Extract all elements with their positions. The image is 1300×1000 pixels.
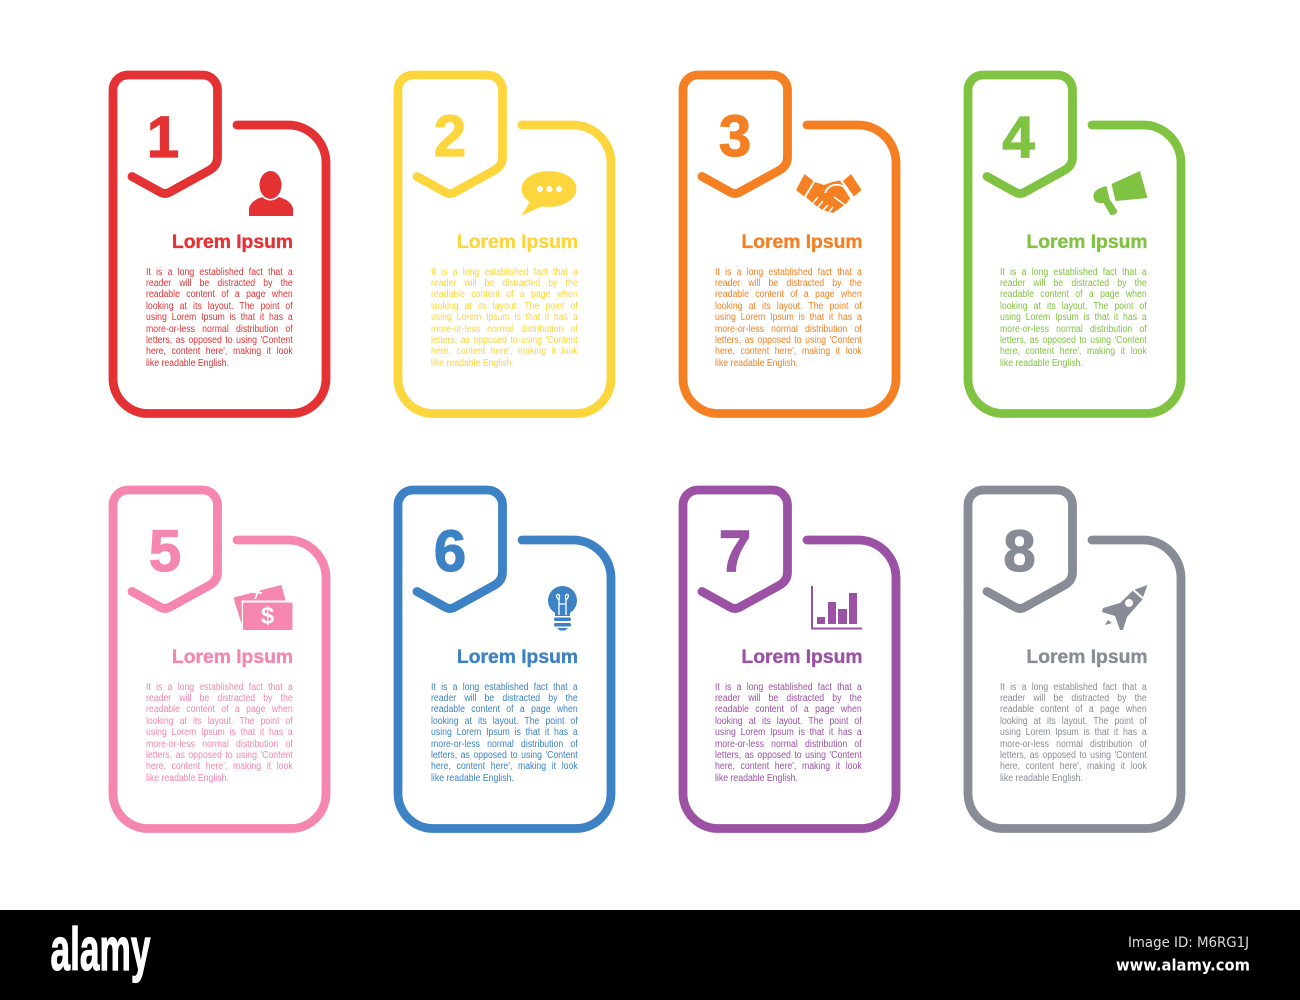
- body text: [1000, 682, 1147, 784]
- body text: readable content of a page when: [715, 289, 862, 300]
- body text: readable content of a page when: [431, 289, 578, 300]
- body text: looking at its layout. The point of: [146, 716, 293, 727]
- heading: Lorem Ipsum: [457, 647, 578, 668]
- body text: more-or-less normal distribution of: [146, 324, 293, 335]
- heading: Lorem Ipsum: [1026, 647, 1147, 668]
- number 2: 2: [434, 104, 466, 169]
- body text: using Lorem Ipsum is that it has a: [1000, 727, 1147, 738]
- body text: readable content of a page when: [146, 289, 293, 300]
- body text: looking at its layout. The point of: [146, 301, 293, 312]
- body text: [146, 682, 293, 784]
- body text: It is a long established fact that a: [431, 266, 578, 278]
- number 8: 8: [1003, 519, 1035, 584]
- body text: letters, as opposed to using 'Content: [146, 750, 293, 761]
- body text: readable content of a page when: [1000, 289, 1147, 300]
- card outline: [682, 490, 896, 828]
- image id: Image ID: M6RG1J: [1128, 935, 1249, 951]
- body text: It is a long established fact that a: [715, 266, 862, 278]
- card outline: [398, 490, 611, 828]
- body text: reader will be distracted by the: [715, 278, 862, 289]
- number 1: 1: [147, 105, 179, 170]
- heading: Lorem Ipsum: [741, 647, 862, 668]
- icon: bar chart: [812, 586, 862, 628]
- body text: here, content here', making it look: [1000, 346, 1147, 357]
- panel: card 3: [678, 70, 900, 418]
- body text: [431, 682, 578, 784]
- body text: letters, as opposed to using 'Content: [146, 335, 293, 346]
- panel: card 5: [108, 486, 330, 833]
- body text: like readable English.: [1000, 358, 1083, 369]
- body text: using Lorem Ipsum is that it has a: [1000, 312, 1147, 323]
- body text: using Lorem Ipsum is that it has a: [715, 727, 862, 738]
- body text: like readable English.: [715, 773, 798, 784]
- body text: using Lorem Ipsum is that it has a: [431, 312, 578, 323]
- body text: more-or-less normal distribution of: [715, 324, 862, 335]
- body text: reader will be distracted by the: [715, 693, 862, 704]
- body text: like readable English.: [431, 358, 514, 369]
- icon: banknotes: [234, 586, 292, 630]
- icon: banknotes: $: [261, 602, 275, 630]
- body text: reader will be distracted by the: [431, 278, 578, 289]
- body text: like readable English.: [146, 358, 229, 369]
- heading: Lorem Ipsum: [172, 232, 293, 253]
- card outline: [968, 490, 1180, 828]
- number 4: 4: [1002, 105, 1034, 170]
- body text: readable content of a page when: [1000, 704, 1147, 715]
- body text: [715, 266, 862, 369]
- body text: It is a long established fact that a: [431, 682, 578, 692]
- body text: letters, as opposed to using 'Content: [715, 335, 862, 346]
- panel: card 1: [108, 70, 330, 418]
- heading: Lorem Ipsum: [1026, 232, 1147, 253]
- alamy logo: alamy: [50, 916, 151, 983]
- number 3: 3: [718, 104, 751, 169]
- body text: looking at its layout. The point of: [431, 716, 578, 727]
- body text: here, content here', making it look: [431, 761, 578, 772]
- body text: looking at its layout. The point of: [715, 301, 862, 312]
- panel: card 7: [678, 486, 900, 833]
- website: www.alamy.com: [1116, 956, 1250, 974]
- body text: more-or-less normal distribution of: [431, 739, 578, 750]
- card outline: [682, 75, 896, 414]
- icon: megaphone: [1093, 171, 1147, 215]
- icon: rocket: [1102, 585, 1147, 630]
- body text: reader will be distracted by the: [146, 278, 293, 289]
- body text: looking at its layout. The point of: [1000, 716, 1147, 727]
- number 5: 5: [149, 519, 181, 584]
- footer bar: [0, 910, 1300, 1000]
- card outline: [113, 490, 326, 828]
- body text: [715, 682, 862, 784]
- number 7: 7: [718, 519, 751, 584]
- body text: It is a long established fact that a: [1000, 682, 1147, 692]
- body text: more-or-less normal distribution of: [1000, 324, 1147, 335]
- body text: looking at its layout. The point of: [715, 716, 862, 727]
- body text: It is a long established fact that a: [715, 682, 862, 692]
- body text: letters, as opposed to using 'Content: [431, 335, 578, 346]
- body text: [146, 266, 293, 369]
- body text: reader will be distracted by the: [1000, 278, 1147, 289]
- icon: handshake: [796, 174, 861, 213]
- body text: more-or-less normal distribution of: [146, 739, 293, 750]
- body text: readable content of a page when: [146, 704, 293, 715]
- body text: more-or-less normal distribution of: [715, 739, 862, 750]
- body text: more-or-less normal distribution of: [431, 324, 578, 335]
- body text: like readable English.: [1000, 773, 1083, 784]
- body text: It is a long established fact that a: [1000, 266, 1147, 278]
- body text: It is a long established fact that a: [146, 266, 293, 278]
- number 6: 6: [434, 519, 466, 584]
- body text: here, content here', making it look: [715, 761, 862, 772]
- icon: speech bubble: [522, 171, 576, 216]
- panel: card 6: [394, 486, 616, 833]
- body text: here, content here', making it look: [1000, 761, 1147, 772]
- card outline: [398, 75, 611, 414]
- body text: looking at its layout. The point of: [431, 301, 578, 312]
- body text: letters, as opposed to using 'Content: [715, 750, 862, 761]
- body text: letters, as opposed to using 'Content: [1000, 750, 1147, 761]
- body text: letters, as opposed to using 'Content: [1000, 335, 1147, 346]
- heading: Lorem Ipsum: [457, 232, 578, 253]
- body text: readable content of a page when: [431, 704, 578, 715]
- body text: reader will be distracted by the: [146, 693, 293, 704]
- icon: person: [249, 171, 293, 216]
- body text: reader will be distracted by the: [431, 693, 578, 704]
- card outline: [968, 75, 1180, 414]
- body text: here, content here', making it look: [146, 761, 293, 772]
- body text: here, content here', making it look: [431, 346, 578, 357]
- body text: [431, 266, 578, 369]
- body text: like readable English.: [715, 358, 798, 369]
- body text: here, content here', making it look: [146, 346, 293, 357]
- heading: Lorem Ipsum: [172, 647, 293, 668]
- body text: more-or-less normal distribution of: [1000, 739, 1147, 750]
- body text: readable content of a page when: [715, 704, 862, 715]
- body text: [1000, 266, 1147, 369]
- panel: card 2: [394, 70, 616, 418]
- body text: like readable English.: [146, 773, 229, 784]
- body text: like readable English.: [431, 773, 514, 784]
- body text: using Lorem Ipsum is that it has a: [715, 312, 862, 323]
- body text: here, content here', making it look: [715, 346, 862, 357]
- body text: It is a long established fact that a: [146, 682, 293, 692]
- panel: card 4: [964, 70, 1186, 418]
- body text: looking at its layout. The point of: [1000, 301, 1147, 312]
- heading: Lorem Ipsum: [741, 232, 862, 253]
- body text: letters, as opposed to using 'Content: [431, 750, 578, 761]
- body text: reader will be distracted by the: [1000, 693, 1147, 704]
- body text: using Lorem Ipsum is that it has a: [146, 312, 293, 323]
- panel: card 8: [964, 486, 1186, 833]
- body text: using Lorem Ipsum is that it has a: [431, 727, 578, 738]
- card outline: [113, 75, 326, 414]
- icon: light bulb: [548, 586, 577, 630]
- body text: using Lorem Ipsum is that it has a: [146, 727, 293, 738]
